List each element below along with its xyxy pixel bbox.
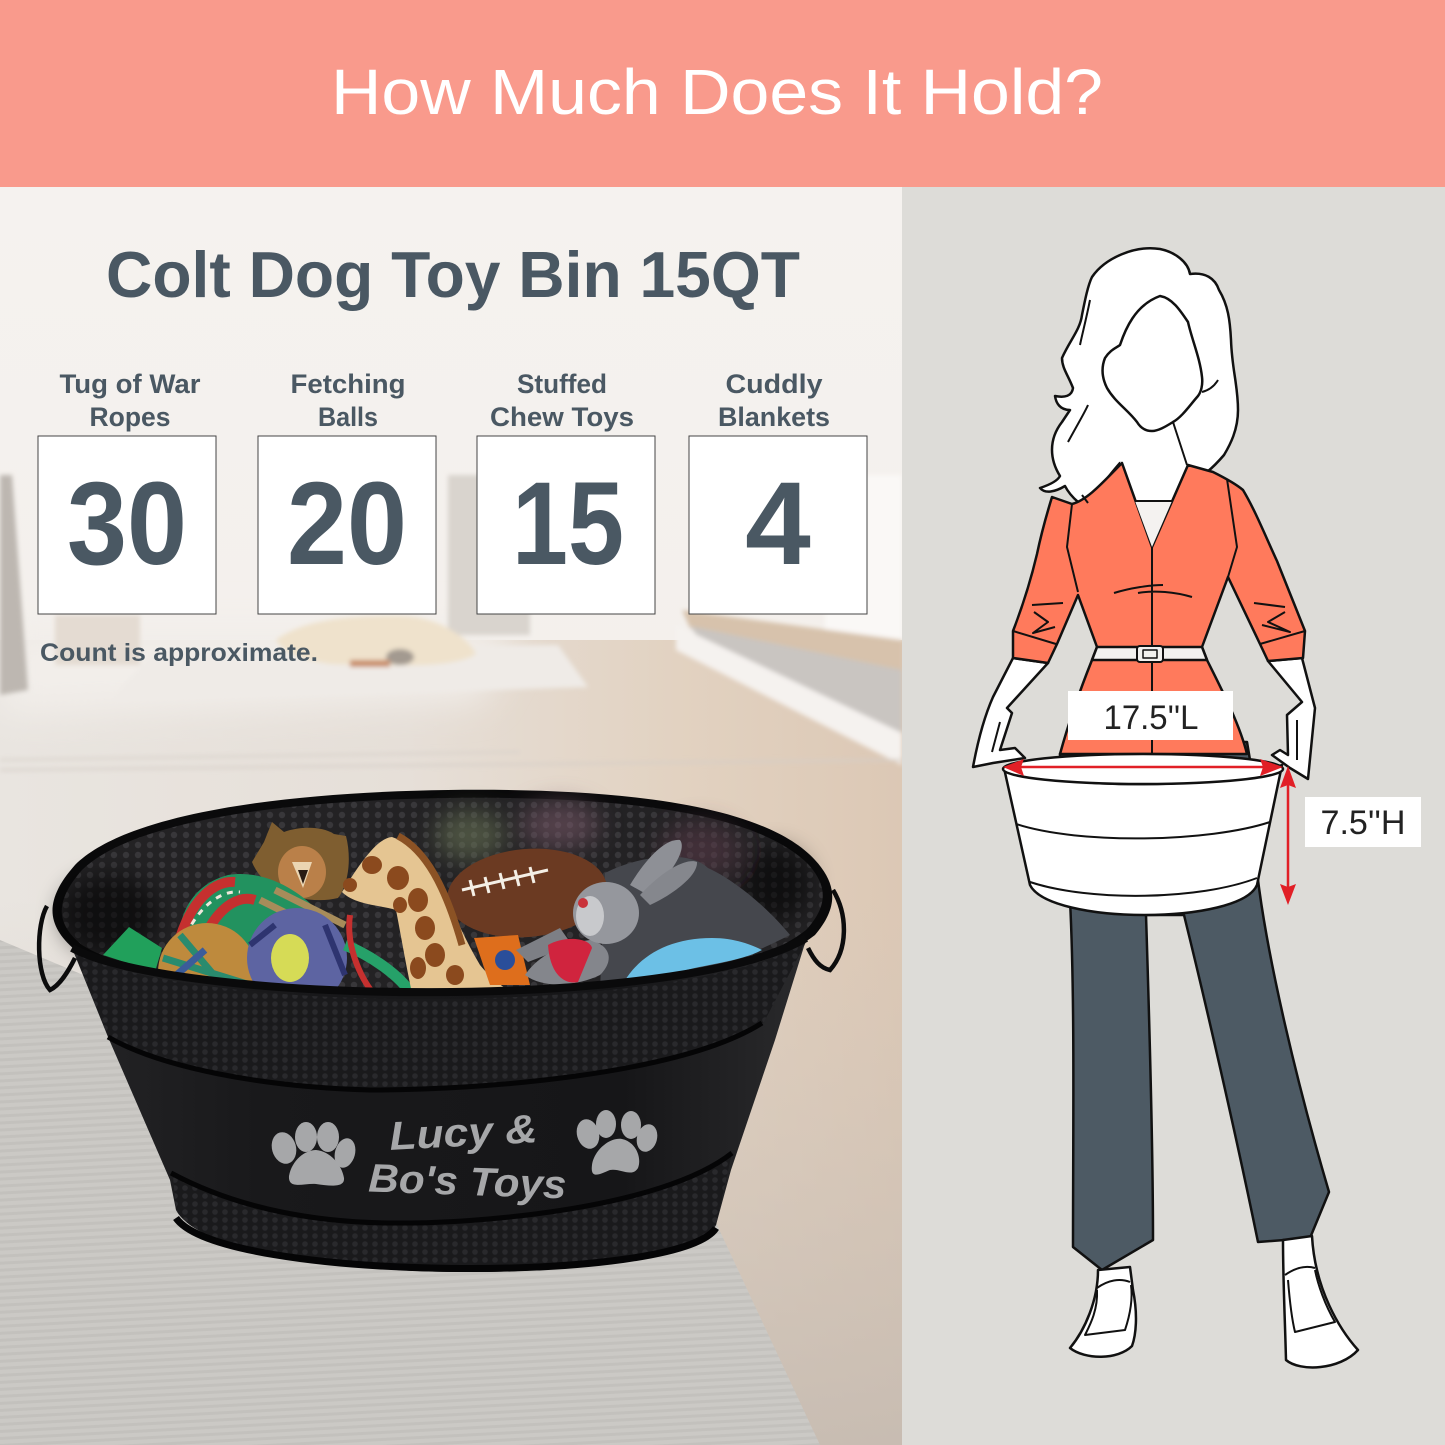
footnote: Count is approximate. xyxy=(40,639,318,667)
bunny xyxy=(630,840,682,895)
bin body xyxy=(72,940,806,1272)
panel: toy count fetching balls: Balls xyxy=(318,402,378,432)
panel: toy count stuffed chew toys: Chew Toys xyxy=(490,402,634,432)
panel: toy count tug of war ropes xyxy=(38,369,216,614)
neck xyxy=(1120,422,1188,547)
panel: toy count cuddly blankets: Blankets xyxy=(718,402,830,432)
toys xyxy=(103,822,790,1021)
bin interior xyxy=(52,790,832,1007)
arrow: length xyxy=(1003,759,1283,776)
bin hammered band xyxy=(74,942,806,1090)
panel: toy count tug of war ropes: 30 xyxy=(67,458,187,590)
interior reflections xyxy=(60,801,810,955)
giraffe xyxy=(342,837,512,993)
engraved name xyxy=(368,1107,567,1207)
engraved name: Lucy & xyxy=(388,1107,538,1159)
lion xyxy=(252,822,349,900)
left foot xyxy=(1070,1267,1136,1357)
callout: height dimension xyxy=(1305,797,1421,847)
shirt xyxy=(1135,501,1172,547)
panel: toy count tug of war ropes: Ropes xyxy=(90,402,170,432)
rope strands xyxy=(345,945,412,995)
panel: toy count fetching balls: 20 xyxy=(287,458,407,590)
icon: bin handles xyxy=(39,890,844,990)
panel: toy count cuddly blankets xyxy=(689,369,867,614)
title: How Much Does It Hold? xyxy=(331,56,1103,128)
rope toy xyxy=(178,874,339,990)
small bin xyxy=(1004,765,1282,915)
hair back xyxy=(1040,248,1238,504)
callout: length dimension: 17.5''L xyxy=(1104,699,1198,737)
trousers xyxy=(1070,880,1329,1270)
towel xyxy=(624,938,762,982)
right foot xyxy=(1283,1236,1358,1367)
panel: toy count stuffed chew toys xyxy=(477,369,655,614)
panel: header banner xyxy=(0,0,1445,187)
football xyxy=(443,842,611,944)
green cloth xyxy=(103,927,162,972)
callout: length dimension xyxy=(1068,691,1233,740)
panel: toy count fetching balls xyxy=(258,369,436,614)
callout: height dimension: 7.5''H xyxy=(1320,804,1406,842)
waist of trousers xyxy=(1060,742,1250,760)
engraved name: Bo's Toys xyxy=(368,1157,567,1207)
ball two xyxy=(247,908,347,1008)
illustration: black toy bin with toys xyxy=(39,790,844,1272)
heading: product name: Colt Dog Toy Bin 15QT xyxy=(106,238,800,311)
panel: photo room background xyxy=(0,187,902,1445)
orange toy xyxy=(474,935,530,985)
blouse xyxy=(1013,463,1305,754)
blanket xyxy=(600,857,790,990)
panel: size comparison background xyxy=(902,187,1445,1445)
arrow: height xyxy=(1280,766,1296,905)
left arm xyxy=(973,658,1048,767)
illustration: woman holding bin xyxy=(973,248,1358,1367)
panel: toy count cuddly blankets: Cuddly xyxy=(726,369,822,399)
panel: toy count cuddly blankets: 4 xyxy=(745,458,811,590)
bin front rim xyxy=(72,938,806,992)
ball one xyxy=(158,923,256,1021)
belt xyxy=(1092,647,1207,660)
face xyxy=(1103,296,1202,431)
panel: toy count tug of war ropes: Tug of War xyxy=(60,369,201,399)
panel: toy count stuffed chew toys: 15 xyxy=(512,458,624,590)
panel: toy count stuffed chew toys: Stuffed xyxy=(517,369,607,399)
panel: toy count fetching balls: Fetching xyxy=(290,369,406,399)
engraved paw prints xyxy=(268,1110,660,1186)
right arm xyxy=(1268,658,1315,779)
